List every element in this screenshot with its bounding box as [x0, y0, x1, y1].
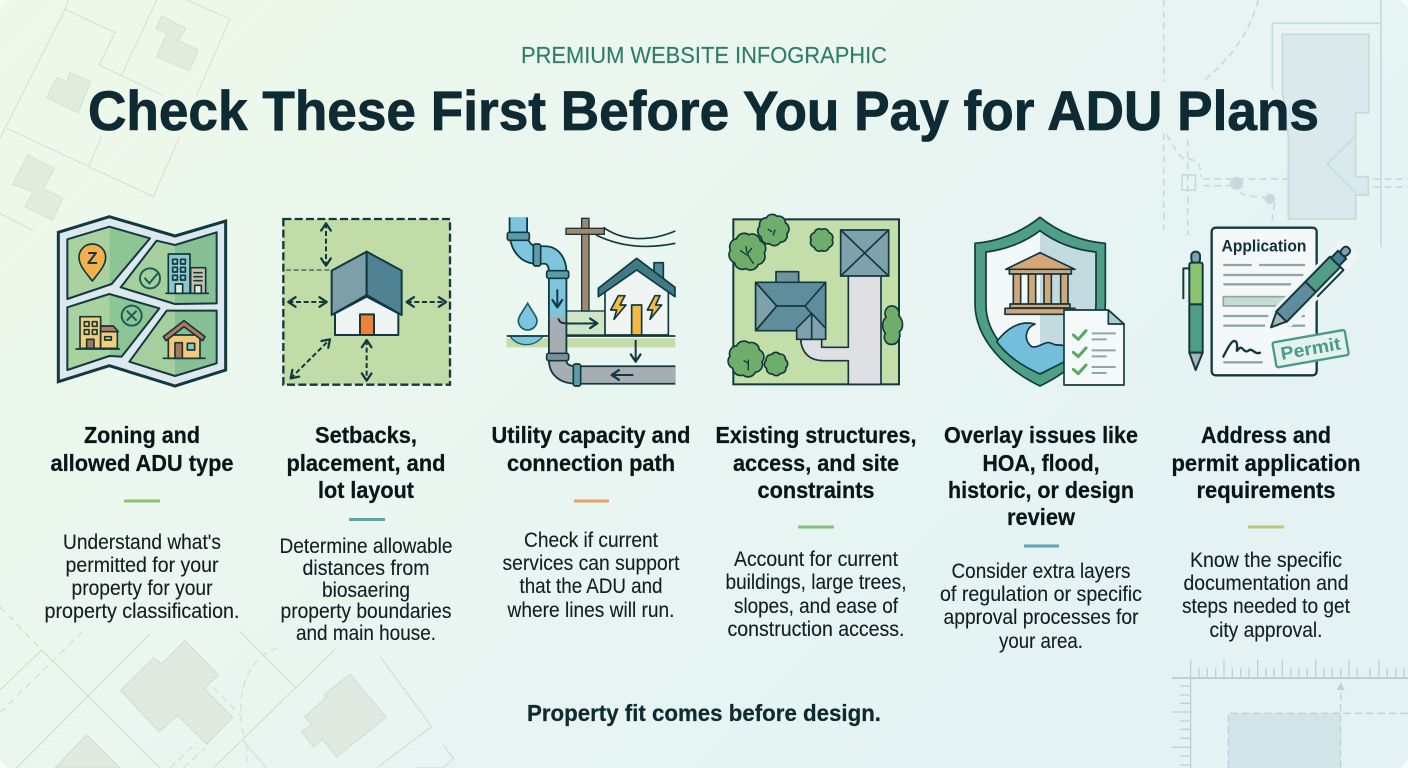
- body: site constraints: slopes, and ease of: [734, 595, 898, 618]
- body: site constraints: construction access.: [728, 618, 904, 641]
- body: setbacks: biosaering: [322, 579, 410, 602]
- body: overlays: your area.: [999, 630, 1083, 653]
- heading: setbacks: lot layout: [318, 477, 414, 503]
- body: permit application: documentation and: [1184, 572, 1348, 595]
- footer tagline: Property fit comes before design.: [527, 700, 881, 726]
- body: overlays: approval processes for: [944, 606, 1138, 629]
- body: setbacks: property boundaries: [280, 600, 452, 623]
- title: Check These First Before You Pay for ADU Plans: [88, 79, 1319, 142]
- heading: zoning: [50, 422, 234, 476]
- icon: lot with setback arrows: [283, 219, 450, 385]
- body: zoning: property for your: [72, 577, 212, 600]
- heading: site constraints: Existing structures,: [716, 422, 916, 448]
- heading: setbacks: Setbacks,: [315, 422, 417, 448]
- body: permit application: Know the specific: [1190, 549, 1342, 572]
- accent rule: [124, 500, 160, 502]
- body: zoning: property classification.: [44, 600, 240, 623]
- heading: utilities: connection path: [507, 450, 675, 476]
- body: setbacks: and main house.: [296, 622, 436, 645]
- heading: site constraints: constraints: [758, 477, 874, 503]
- panel: utilities: [492, 217, 690, 622]
- accent rule: [574, 500, 609, 502]
- heading: overlays: Overlay issues like: [944, 422, 1138, 448]
- panel: permit application: [1172, 228, 1360, 642]
- body: overlays: [940, 560, 1142, 653]
- heading: site constraints: access, and site: [733, 450, 899, 476]
- heading: permit application: Address and: [1201, 422, 1331, 448]
- panel: zoning: [44, 217, 240, 623]
- icon: shield with temple, wave and checklist: [975, 217, 1124, 386]
- kicker: PREMIUM WEBSITE INFOGRAPHIC: [521, 42, 887, 68]
- icon: pipes, power and house: [507, 217, 675, 386]
- icon: site plan: [726, 212, 903, 384]
- heading: overlays: historic, or design: [948, 477, 1134, 503]
- panel: overlays: [940, 217, 1142, 653]
- body: zoning: Understand what's: [63, 531, 221, 554]
- heading: overlays: HOA, flood,: [982, 450, 1100, 476]
- heading: permit application: [1172, 422, 1360, 503]
- body: overlays: of regulation or specific: [940, 583, 1142, 606]
- body: permit application: steps needed to get: [1182, 595, 1350, 618]
- icon: zoning map: Z: [87, 248, 98, 268]
- heading: zoning: allowed ADU type: [50, 450, 234, 476]
- icon: application, pens and permit stamp: Permit: [1279, 334, 1342, 364]
- body: utilities: that the ADU and: [520, 575, 662, 598]
- body: overlays: Consider extra layers: [952, 560, 1130, 583]
- body: site constraints: buildings, large trees,: [726, 571, 906, 594]
- accent rule: [1248, 526, 1284, 528]
- icon: application, pens and permit stamp: Application: [1222, 238, 1306, 256]
- body: utilities: Check if current: [524, 529, 658, 552]
- panel: setbacks: [280, 219, 452, 645]
- background: parcel map bottom left: [0, 607, 453, 768]
- body: permit application: city approval.: [1210, 619, 1322, 642]
- heading: setbacks: placement, and: [286, 450, 446, 476]
- heading: setbacks: [286, 422, 446, 503]
- background: ruler and plot bottom right: [1172, 659, 1408, 768]
- heading: permit application: permit application: [1172, 450, 1360, 476]
- accent rule: [798, 526, 834, 528]
- body: setbacks: [280, 535, 452, 645]
- body: permit application: [1182, 549, 1350, 642]
- heading: overlays: [944, 422, 1138, 530]
- body: utilities: services can support: [502, 552, 680, 575]
- icon: application, pens and permit stamp: [1183, 228, 1360, 375]
- heading: zoning: Zoning and: [84, 422, 200, 448]
- accent rule: [1024, 544, 1059, 548]
- body: zoning: [44, 531, 240, 623]
- body: setbacks: distances from: [302, 557, 430, 580]
- body: utilities: [502, 529, 680, 622]
- accent rule: [349, 518, 385, 521]
- background: site plan top right: [1164, 0, 1408, 247]
- body: zoning: permitted for your: [66, 554, 218, 577]
- icon: zoning map: [58, 217, 226, 386]
- body: site constraints: Account for current: [734, 548, 898, 571]
- panel: site constraints: [716, 212, 916, 641]
- heading: site constraints: [716, 422, 916, 503]
- body: utilities: where lines will run.: [507, 599, 674, 622]
- body: site constraints: [726, 548, 906, 641]
- heading: permit application: requirements: [1196, 477, 1336, 503]
- heading: overlays: review: [1007, 504, 1076, 530]
- background: parcel map top left: [0, 0, 230, 231]
- heading: utilities: [492, 422, 690, 476]
- body: setbacks: Determine allowable: [280, 535, 452, 558]
- heading: utilities: Utility capacity and: [492, 422, 690, 448]
